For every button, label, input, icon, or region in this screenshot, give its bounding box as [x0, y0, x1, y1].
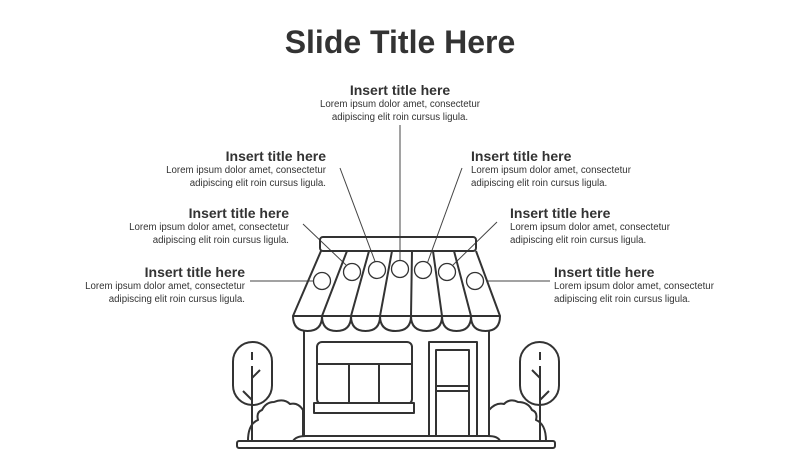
text block: right 3 [554, 264, 714, 304]
awning [293, 237, 500, 331]
building [304, 320, 489, 441]
text block: left 2: adipiscing elit roin cursus ligula. [153, 234, 289, 246]
text block: left 2: Lorem ipsum dolor amet, consectetur [129, 222, 289, 233]
text block: top center: Insert title here [350, 82, 450, 98]
text block: left 1: Insert title here [226, 148, 326, 164]
ground [237, 441, 555, 448]
text block: left 1: adipiscing elit roin cursus ligula. [190, 178, 326, 188]
connector lines [250, 125, 550, 281]
text block: left 1 [166, 148, 326, 188]
window [314, 342, 414, 413]
text block: right 2: Insert title here [510, 205, 610, 221]
text block: top center [320, 82, 480, 122]
text block: right 3: Insert title here [554, 264, 654, 280]
text block: right 3: Lorem ipsum dolor amet, consectetur [554, 281, 714, 292]
text block: left 3: Insert title here [145, 264, 245, 280]
text block: right 1: adipiscing elit roin cursus ligula. [471, 178, 607, 188]
trees [233, 342, 559, 441]
text block: right 1: Insert title here [471, 148, 571, 164]
text block: left 1: Lorem ipsum dolor amet, consectetur [166, 165, 326, 176]
text block: right 2: adipiscing elit roin cursus ligula. [510, 234, 646, 246]
text block: right 2: Lorem ipsum dolor amet, consectetur [510, 222, 670, 233]
text block: right 1 [471, 148, 631, 188]
text block: left 3: adipiscing elit roin cursus ligula. [109, 294, 245, 304]
text block: left 2 [129, 205, 289, 246]
text block: left 3 [85, 264, 245, 304]
text block: top center: adipiscing elit roin cursus ligula. [332, 112, 468, 122]
text block: right 1: Lorem ipsum dolor amet, consectetur [471, 165, 631, 176]
text block: top center: Lorem ipsum dolor amet, consectetur [320, 99, 480, 110]
text block: right 3: adipiscing elit roin cursus ligula. [554, 294, 690, 304]
lamps [314, 260, 484, 290]
door [429, 342, 477, 441]
text block: right 2 [510, 205, 670, 246]
text block: left 3: Lorem ipsum dolor amet, consectetur [85, 281, 245, 292]
text block: left 2: Insert title here [189, 205, 289, 221]
title: Slide Title Here [285, 24, 515, 60]
bushes [248, 400, 303, 441]
